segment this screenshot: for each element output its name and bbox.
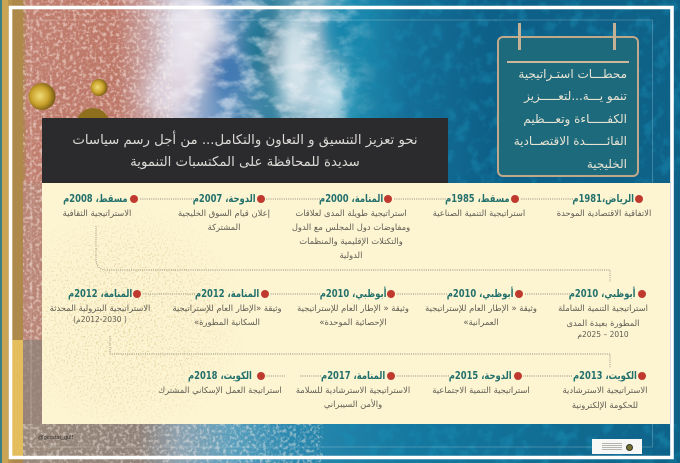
logo box (592, 439, 642, 454)
milestone: Manama 2000 (292, 193, 410, 260)
milestone: Muscat 2008: الاستراتيجية الثقافية (63, 208, 131, 218)
gold speckle texture (42, 210, 238, 424)
milestone: Kuwait 2018: الكويت، 2018م (188, 370, 252, 382)
milestone: Abu Dhabi 2010 statistics: الإحصائية الموحدة» (319, 317, 387, 327)
milestone: Riyadh 1981 (557, 193, 651, 218)
milestone: Manama 2017: المنامة، 2017م (321, 370, 385, 382)
milestone: Manama 2000: المنامة، 2000م (319, 193, 383, 205)
milestone: Manama 2000: ومفاوضات دول المجلس مع الدول (292, 222, 410, 232)
card rule (507, 61, 629, 63)
milestone: Abu Dhabi 2010 urban (425, 286, 537, 327)
calendar card title (497, 23, 639, 177)
card text: تنمو يـــة...لتعـــــزيز (524, 89, 627, 103)
milestone: Abu Dhabi 2010 long-term: 2010 – 2025م (577, 330, 629, 339)
dark heading box (42, 118, 448, 183)
handle credit text: @gccstat_gulf (38, 435, 73, 441)
milestone: Muscat 2008: مسقط، 2008م (64, 193, 128, 205)
milestone: Doha 2007: المشتركة (208, 222, 240, 232)
milestone: Abu Dhabi 2010 urban: وثيقة « الإطار العام للإستراتيجية (425, 303, 537, 313)
heading text: سديدة للمحافظة على المكتسبات التنموية (130, 154, 360, 170)
milestone: Kuwait 2013: للحكومة الإلكترونية (572, 400, 638, 410)
milestone: Doha 2007 (178, 193, 270, 232)
milestone: Abu Dhabi 2010 urban: أبوظبي، 2010م (447, 288, 514, 300)
milestone: Doha 2015: استراتيجية التنمية الاجتماعية (432, 385, 530, 395)
cream content panel (42, 183, 670, 424)
milestone: Manama 2012 housing (172, 288, 282, 327)
timeline row 1 (63, 193, 651, 260)
card text: محطـــات استـراتيجية (518, 67, 627, 81)
milestone: Riyadh 1981: الرياض،1981م (572, 193, 634, 205)
milestone: Manama 2012 housing: وثيقة «الإطار العام للإستراتيجية (172, 303, 282, 313)
heading text: نحو تعزيز التنسيق و التعاون والتكامل... من أجل رسم سياسات (72, 132, 418, 148)
milestone: Muscat 1985 (433, 193, 525, 218)
milestone: Doha 2015 (432, 370, 530, 395)
milestone: Manama 2000: استراتيجية طويلة المدى لعلاقات (295, 208, 407, 218)
logo text (602, 443, 622, 450)
card text: الخليجية (587, 157, 627, 171)
milestone: Muscat 2008 (63, 193, 138, 218)
milestone: Manama 2012 housing: المنامة، 2012م (195, 288, 259, 300)
milestone: Abu Dhabi 2010 long-term (558, 286, 648, 339)
milestone: Doha 2015: الدوحة، 2015م (449, 370, 512, 382)
milestone: Doha 2007: الدوحة، 2007م (193, 193, 256, 205)
milestone: Riyadh 1981: الاتفاقية الاقتصادية الموحدة (557, 208, 651, 218)
timeline row 2 (50, 286, 648, 339)
gold spheres (28, 79, 110, 142)
milestone: Abu Dhabi 2010 statistics: أبوظبي، 2010م (320, 288, 387, 300)
milestone: Manama 2012 petroleum (50, 288, 150, 324)
card text: الفائــــــدة الاقتصــادية (514, 134, 627, 148)
milestone: Manama 2012 petroleum: ( 2012-2030م) (73, 315, 127, 324)
milestone: Kuwait 2018 (158, 370, 282, 396)
milestone: Manama 2017: والأمن السيبراني (324, 399, 382, 409)
milestone: Doha 2007: إعلان قيام السوق الخليجية (178, 208, 270, 218)
card text: الكفـــــاءة وتعـــظيم (523, 112, 627, 126)
milestone: Kuwait 2013: الكويت، 2013م (573, 370, 637, 382)
milestone: Kuwait 2013 (563, 370, 647, 410)
card text (514, 67, 627, 171)
milestone: Manama 2000: الدولية (340, 250, 362, 260)
milestone: Muscat 1985: مسقط، 1985م (446, 193, 510, 205)
milestone: Manama 2012 petroleum: الاستراتيجية البترولية المحدثة (50, 303, 150, 313)
left gold strip (0, 0, 2, 463)
bottom photo strip (12, 424, 680, 463)
milestone: Abu Dhabi 2010 statistics (297, 286, 409, 327)
milestone: Abu Dhabi 2010 statistics: وثيقة « الإطار العام للإستراتيجية (297, 303, 409, 313)
milestone: Manama 2017 (296, 370, 410, 410)
milestone: Manama 2017: الاستراتيجية الاسترشادية للسلامة (296, 385, 410, 395)
milestone: Manama 2012 housing: السكانية المطورة» (194, 317, 260, 327)
milestone: Kuwait 2013: الاستراتيجية الاسترشادية (563, 385, 647, 395)
card body (497, 36, 639, 177)
milestone: Abu Dhabi 2010 long-term: استراتيجية التنمية الشاملة (558, 303, 648, 313)
milestone: Manama 2012 petroleum: المنامة، 2012م (68, 288, 132, 300)
heading text (72, 130, 418, 170)
milestone: Abu Dhabi 2010 urban: العمرانية» (463, 317, 499, 327)
card rings (518, 23, 616, 50)
logo mark (626, 444, 633, 451)
milestone: Abu Dhabi 2010 long-term: أبوظبي، 2010م (569, 288, 636, 300)
milestone: Manama 2000: والتكتلات الإقليمية والمنظمات (299, 236, 403, 246)
milestone: Abu Dhabi 2010 long-term: المطورة بعيدة المدى (566, 318, 640, 328)
timeline row 3 (158, 370, 647, 410)
milestone: Muscat 1985: استراتيجية التنمية الصناعية (433, 208, 525, 218)
milestone: Kuwait 2018: استراتيجة العمل الإسكاني المشترك (158, 385, 282, 395)
